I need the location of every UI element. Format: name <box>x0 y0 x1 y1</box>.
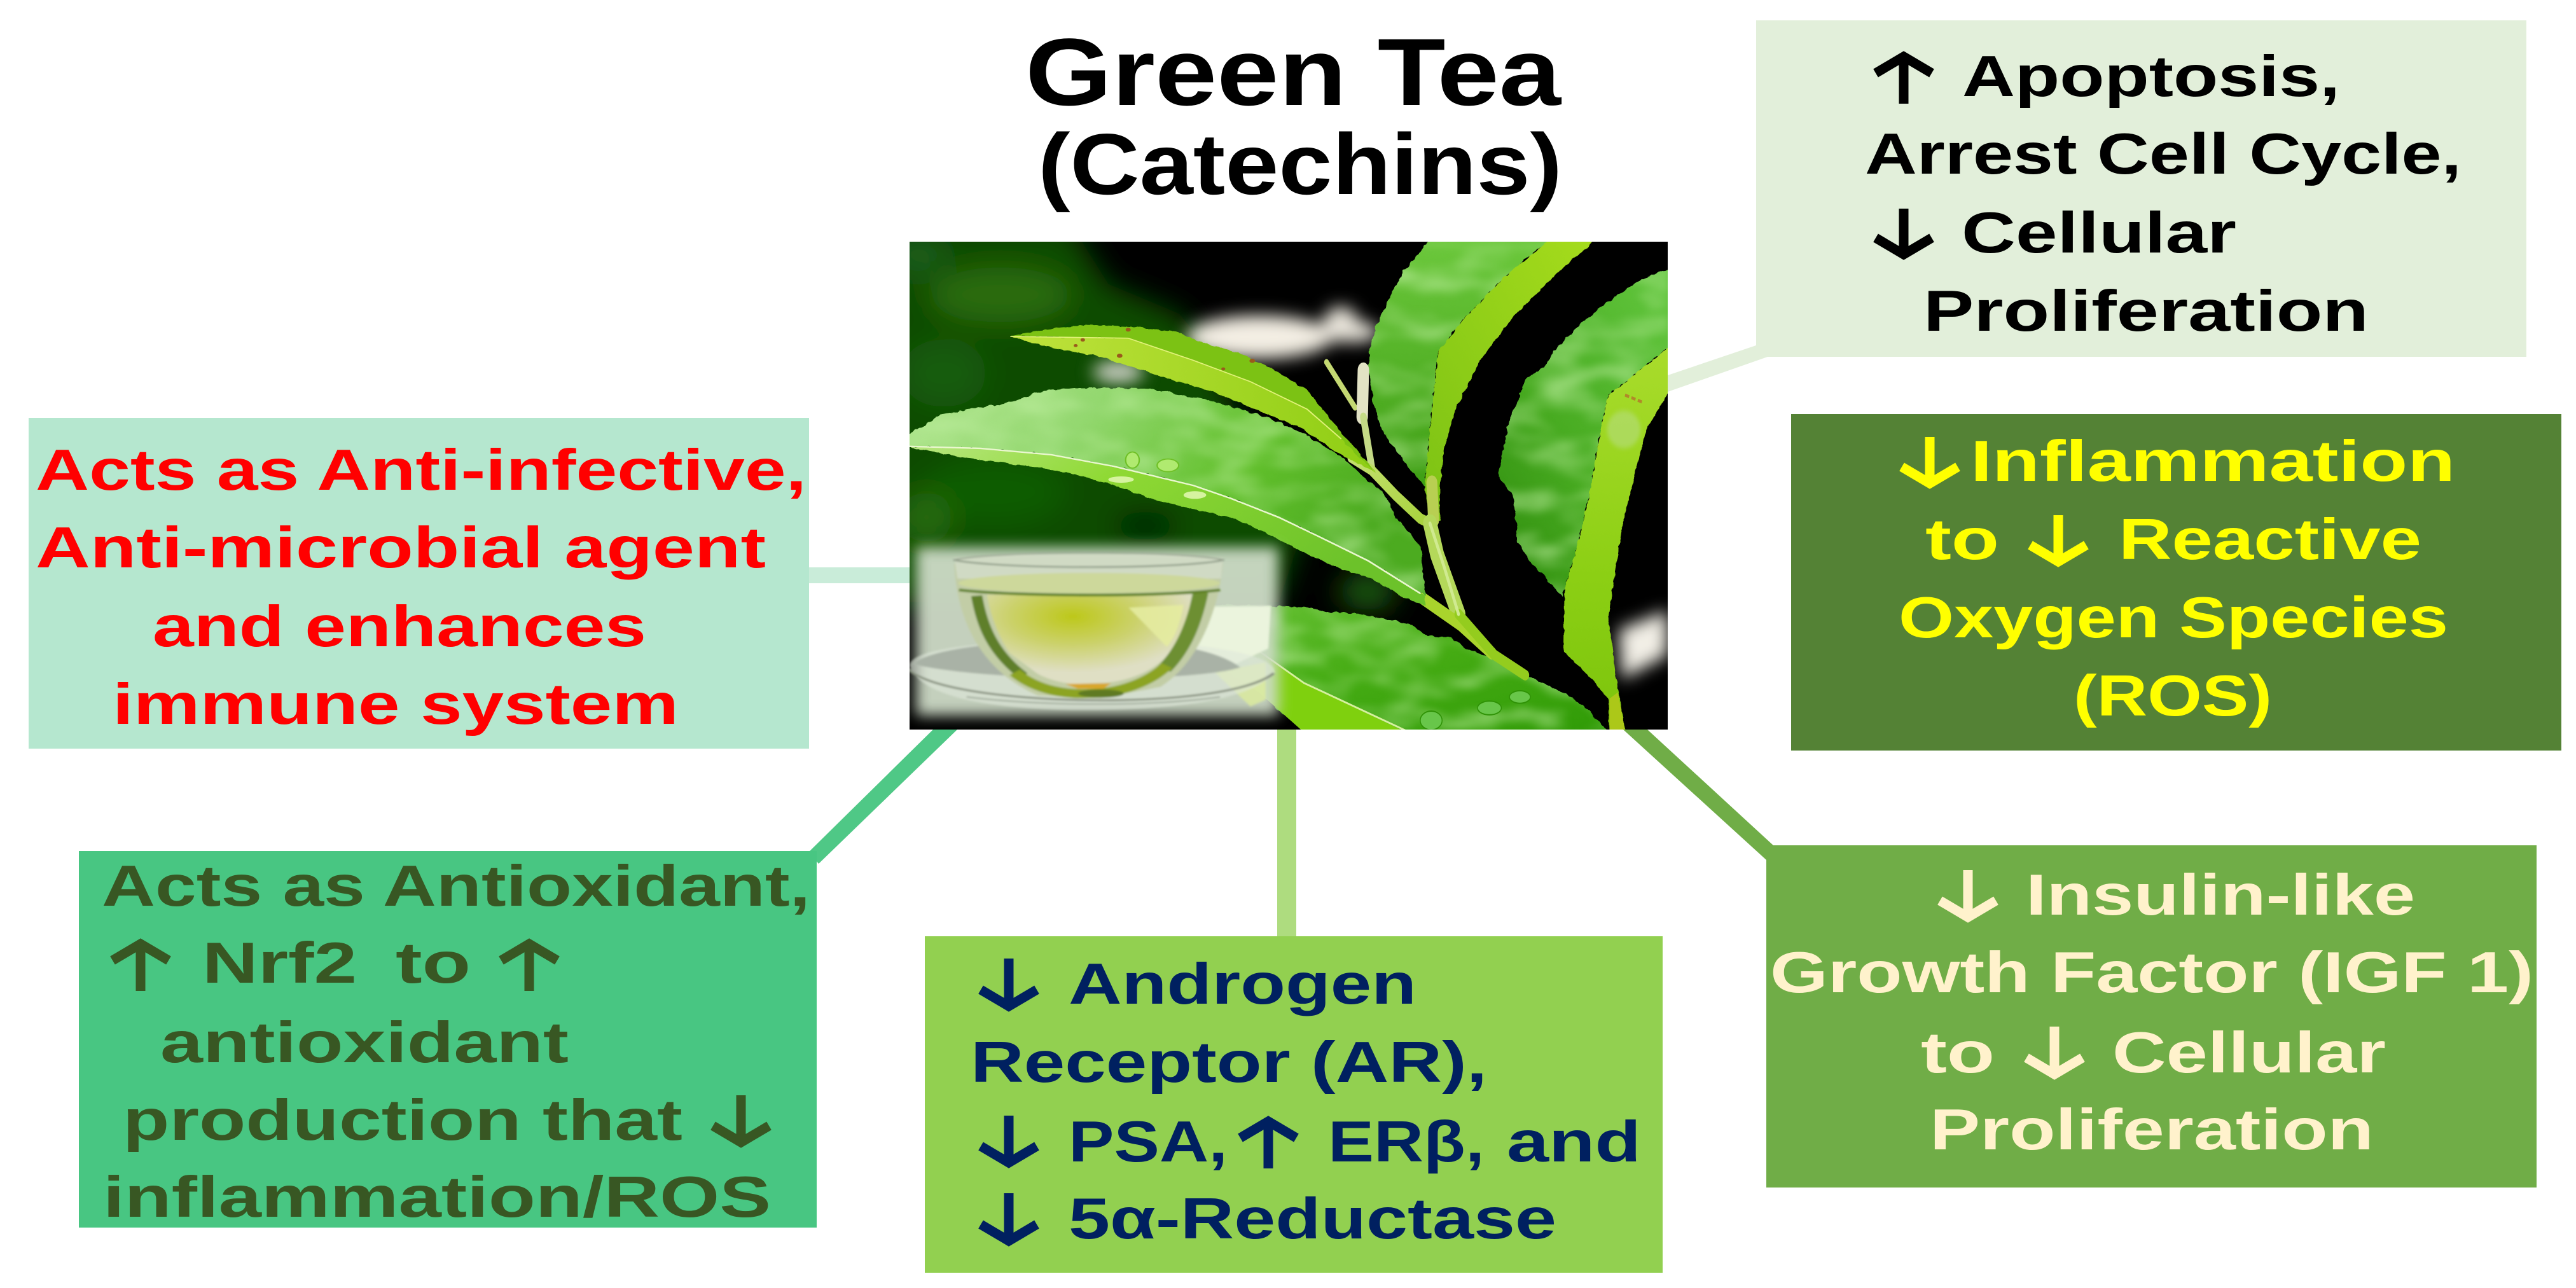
text: inflammation: Inflammation <box>1970 429 2455 494</box>
icon: down arrow <box>981 1116 1037 1163</box>
blurred background greens and highlights <box>881 221 1668 679</box>
leaf: large left <box>907 388 1425 606</box>
text: reactive: Reactive <box>2119 508 2421 572</box>
panel: androgen receptor <box>925 936 1663 1273</box>
text: 5 alpha reductase: 5α-Reductase <box>1069 1187 1556 1251</box>
text: immune system: immune system <box>113 672 679 737</box>
connector: photo to androgen panel <box>1277 730 1296 937</box>
icon: up arrow <box>113 944 169 991</box>
title: Green Tea <box>1025 18 1562 125</box>
tea cup inset <box>909 547 1278 716</box>
text: growth factor IGF 1: Growth Factor (IGF 1) <box>1770 941 2533 1005</box>
text: to: to <box>1925 508 1999 572</box>
leaf: right <box>1498 267 1675 733</box>
connector: photo to antioxidant panel <box>809 730 957 864</box>
text: oxygen species: Oxygen Species <box>1899 586 2448 650</box>
text: ER beta: ERβ, <box>1328 1110 1485 1174</box>
text: insulin-like: Insulin-like <box>2026 863 2415 927</box>
icon: down arrow <box>981 1193 1037 1241</box>
icon: up arrow <box>1876 57 1932 104</box>
panel: anti-infective <box>29 418 809 749</box>
icon: up arrow <box>1240 1121 1296 1168</box>
text: and enhances: and enhances <box>153 595 646 659</box>
text: acts as anti-infective: Acts as Anti-infective, <box>36 438 807 502</box>
connector: photo to IGF panel <box>1623 730 1774 860</box>
connector: photo to anti-infective panel <box>809 567 911 583</box>
leaf: bottom <box>1222 604 1607 730</box>
icon: down arrow <box>1940 870 1996 917</box>
icon: down arrow <box>981 959 1037 1006</box>
title <box>1025 18 1562 212</box>
icon: up arrow <box>501 944 557 991</box>
bowl wall shading <box>977 596 1023 675</box>
text: androgen: Androgen <box>1069 952 1416 1016</box>
text: arrest cell cycle: Arrest Cell Cycle, <box>1865 122 2462 186</box>
connector: photo to apoptosis panel <box>1668 345 1768 392</box>
stems <box>1327 362 1525 675</box>
text: production that: production that <box>123 1088 682 1153</box>
text: proliferation: Proliferation <box>1923 279 2369 343</box>
text: anti-microbial agent: Anti-microbial agent <box>36 516 766 580</box>
icon: down arrow <box>2026 1027 2082 1074</box>
panel: insulin-like growth factor <box>1766 845 2537 1188</box>
text: proliferation: Proliferation <box>1930 1098 2374 1162</box>
text: antioxidant: antioxidant <box>160 1011 569 1075</box>
icon: down arrow <box>2030 515 2086 562</box>
text: to: to <box>396 931 471 995</box>
photo: tea leaves and cup <box>881 221 1675 735</box>
panel: apoptosis and cell cycle <box>1756 20 2526 357</box>
panel: inflammation and ROS <box>1791 414 2561 751</box>
saucer <box>910 640 1275 710</box>
text: receptor AR: Receptor (AR), <box>971 1030 1487 1095</box>
text: inflammation/ROS: inflammation/ROS <box>103 1165 771 1229</box>
icon: down arrow <box>1902 437 1958 483</box>
leaf: small upper <box>1010 325 1375 473</box>
leaf: top centre <box>1368 239 1598 520</box>
icon: down arrow <box>713 1095 769 1142</box>
text: Nrf2: Nrf2 <box>202 931 357 995</box>
panel: antioxidant <box>79 851 817 1229</box>
title: (Catechins) <box>1038 116 1562 212</box>
text: cellular: Cellular <box>1962 201 2236 265</box>
tea liquid <box>987 594 1192 684</box>
text: acts as antioxidant: Acts as Antioxidant, <box>102 854 810 918</box>
icon: down arrow <box>1876 209 1932 254</box>
text: cellular: Cellular <box>2112 1021 2386 1085</box>
text: and: and <box>1507 1110 1641 1174</box>
text: to: to <box>1921 1021 1995 1085</box>
text: apoptosis: Apoptosis, <box>1962 45 2340 109</box>
washed-out leaf tip <box>1197 605 1271 663</box>
bowl <box>954 564 1223 698</box>
text: PSA: PSA, <box>1069 1110 1228 1174</box>
text: ROS: (ROS) <box>2074 664 2272 728</box>
